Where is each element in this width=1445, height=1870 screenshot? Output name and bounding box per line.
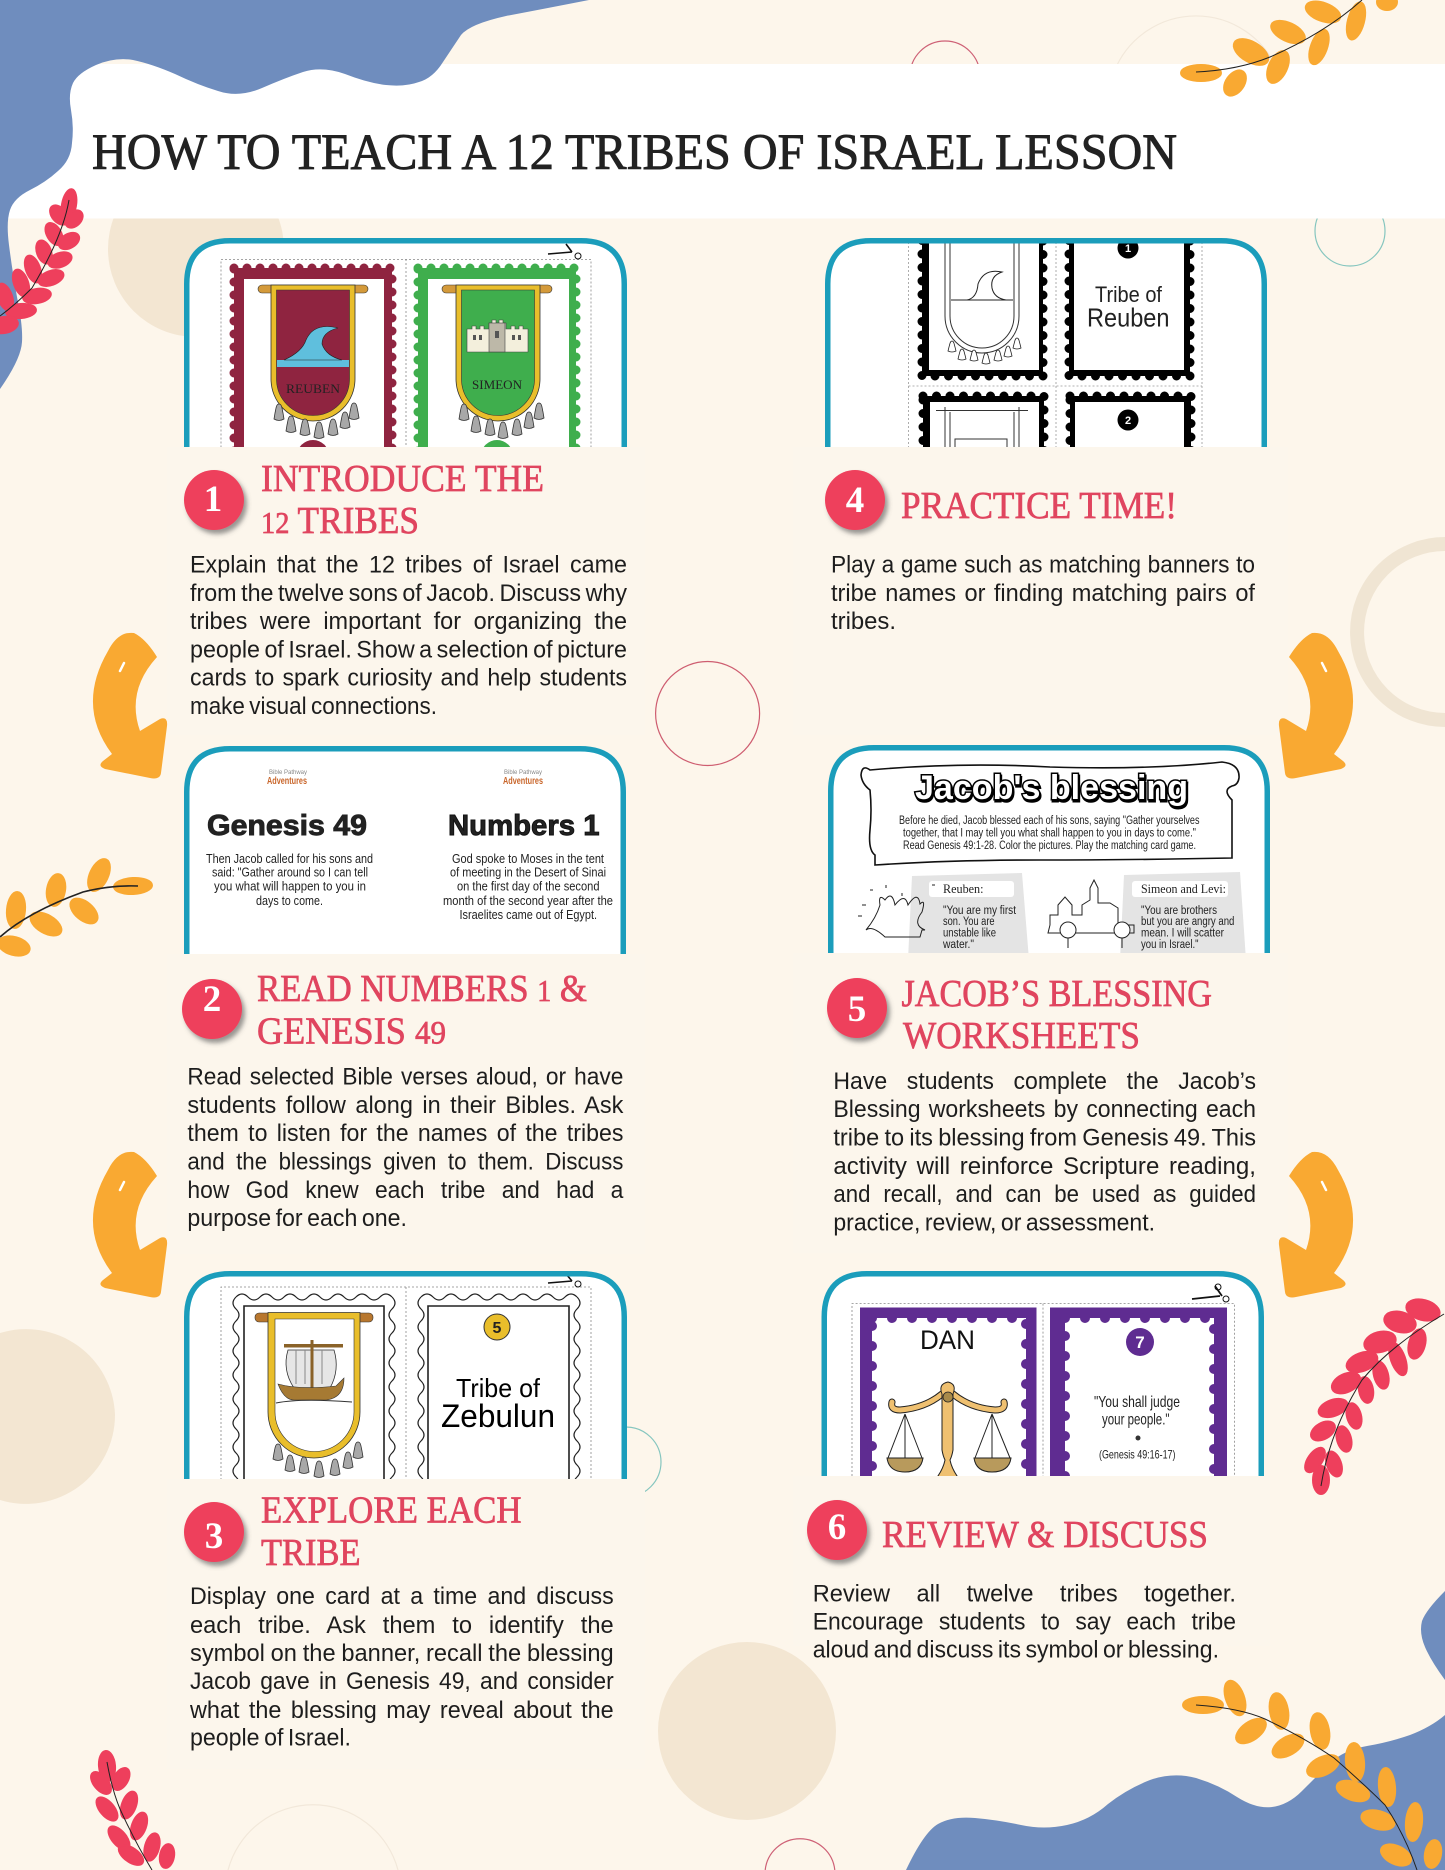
card image: Genesis 49 and Numbers 1: Bible Pathway — [504, 770, 542, 776]
blue blob top left — [0, 0, 589, 389]
card image: Genesis 49 and Numbers 1: Israelites came out of Egypt. — [460, 908, 597, 922]
heading: WORKSHEETS — [903, 1015, 1140, 1057]
blue blob bottom right — [906, 1591, 1445, 1870]
card image: Genesis 49 and Numbers 1: Bible Pathway — [269, 770, 307, 776]
card image: Genesis 49 and Numbers 1: Then Jacob called for his sons and — [206, 852, 373, 866]
card image: Jacob's blessing worksheet — [831, 748, 1267, 960]
heading — [902, 973, 1212, 1057]
card image: Jacob's blessing worksheet: but you are angry and — [1141, 916, 1234, 928]
branch: orange bottom right — [1183, 1678, 1443, 1870]
card image: Genesis 49 and Numbers 1: God spoke to Moses in the tent — [452, 852, 604, 866]
card image: Genesis 49 and Numbers 1: you what will happen to you in — [214, 880, 366, 894]
body text: tribes were important for organizing the — [190, 608, 627, 635]
card image: black and white Reuben cards: 1 — [1125, 243, 1131, 255]
card image: Dan scales and blessing card: (Genesis 49:16-17) — [1099, 1448, 1176, 1462]
body text: symbol on the banner, recall the blessing — [190, 1640, 614, 1667]
body text: Jacob gave in Genesis 49, and consider — [190, 1668, 614, 1695]
card image: Reuben and Simeon banners: REUBEN — [286, 381, 341, 396]
title band — [0, 64, 1445, 218]
arrow: step 4 to step 5 — [1279, 633, 1353, 778]
card image: Genesis 49 and Numbers 1: Adventures — [267, 776, 307, 787]
body text: Review all twelve tribes together. — [813, 1581, 1236, 1608]
heading: TRIBE — [261, 1532, 360, 1574]
card image: Jacob's blessing worksheet: son. You are — [943, 916, 995, 928]
number badge 2: 2 — [203, 979, 221, 1020]
body text: practice, review, or assessment. — [833, 1210, 1155, 1237]
body text: Play a game such as matching banners to — [831, 551, 1255, 578]
card image: Genesis 49 and Numbers 1: Adventures — [503, 776, 543, 787]
card image: Genesis 49 and Numbers 1: of meeting in the Desert of Sinai — [450, 866, 606, 880]
body text: Encourage students to say each tribe — [813, 1609, 1236, 1636]
heading: PRACTICE TIME! — [901, 485, 1177, 527]
card image: Genesis 49 and Numbers 1: Numbers 1 — [448, 810, 600, 842]
card image: Dan scales and blessing card — [824, 1274, 1261, 1500]
number badge 6 — [807, 1500, 867, 1560]
card image: Dan scales and blessing card: 7 — [1135, 1333, 1145, 1352]
card image: Jacob's blessing worksheet: unstable like — [943, 928, 996, 940]
heading — [261, 458, 544, 542]
card image: Genesis 49 and Numbers 1 — [187, 749, 623, 954]
card image: Jacob's blessing worksheet: Jacob's blessing — [915, 769, 1188, 807]
arrow: step 2 to step 3 — [93, 1152, 167, 1297]
number badge 2 — [182, 979, 242, 1039]
card image: black and white Reuben cards: Reuben — [1087, 302, 1170, 332]
body text: tribe names or finding matching pairs of — [831, 580, 1255, 607]
card image: Dan scales and blessing card: DAN — [920, 1325, 975, 1355]
heading — [261, 1490, 522, 1574]
body text: cards to spark curiosity and help students — [190, 665, 627, 692]
body text — [813, 1581, 1236, 1664]
card image: Jacob's blessing worksheet: water." — [942, 939, 974, 951]
number badge 4 — [825, 470, 885, 530]
card image: Reuben and Simeon banners: SIMEON — [472, 377, 523, 392]
body text: each tribe. Ask them to identify the — [190, 1612, 614, 1639]
body text — [831, 551, 1255, 635]
card image: Genesis 49 and Numbers 1: Genesis 49 — [207, 810, 367, 842]
card image: Jacob's blessing worksheet: mean. I will scatter — [1141, 928, 1224, 940]
arrow: step 5 to step 6 — [1279, 1152, 1353, 1297]
body text — [189, 1583, 614, 1752]
step 6 panel — [793, 1274, 1270, 1664]
body text: people of Israel. Show a selection of picture — [190, 636, 627, 663]
card image: Jacob's blessing worksheet: "You are my first — [943, 905, 1017, 917]
body text: them to listen for the names of the tribes — [187, 1120, 623, 1147]
card image: Jacob's blessing worksheet: "You are brothers — [1141, 905, 1217, 917]
body text: Display one card at a time and discuss — [190, 1583, 614, 1610]
card image: Dan scales and blessing card: "You shall judge — [1094, 1394, 1180, 1411]
branch: red bottom left — [87, 1750, 176, 1870]
number badge 6: 6 — [828, 1507, 846, 1548]
title: HOW TO TEACH A 12 TRIBES OF ISRAEL LESSON — [92, 125, 1177, 181]
body text: activity will reinforce Scripture reading, — [833, 1153, 1256, 1180]
card image: Jacob's blessing worksheet: Before he died, Jacob blessed each of his sons, saying "Gather yourselves — [899, 815, 1200, 827]
step 1 panel — [184, 238, 627, 714]
step 5 panel — [827, 745, 1270, 1236]
card image: Jacob's blessing worksheet: Reuben: — [943, 881, 984, 896]
body text — [833, 1068, 1256, 1237]
body text: students follow along in their Bibles. Ask — [187, 1092, 624, 1119]
number badge 1: 1 — [204, 479, 222, 520]
body text: purpose for each one. — [187, 1205, 407, 1232]
card image: Genesis 49 and Numbers 1: said: "Gather around so I can tell — [212, 866, 368, 880]
card image: Zebulun banner and name cards: Zebulun — [441, 1398, 555, 1434]
number badge 4: 4 — [846, 480, 864, 521]
heading: INTRODUCE THE — [261, 458, 544, 500]
body text — [190, 551, 627, 720]
body text: Blessing worksheets by connecting each — [833, 1096, 1256, 1123]
step 2 panel — [182, 746, 626, 1231]
number badge 5 — [827, 978, 887, 1038]
branch: red top left — [0, 188, 86, 335]
number badge 3 — [184, 1502, 244, 1562]
number badge 5: 5 — [848, 989, 866, 1030]
card image: Jacob's blessing worksheet: you in Israel." — [1141, 939, 1198, 951]
card image: black and white Reuben cards: Tribe of — [1095, 282, 1163, 307]
arrow: step 1 to step 2 — [93, 633, 167, 778]
card image: Zebulun banner and name cards — [187, 1274, 624, 1500]
body text — [187, 1064, 624, 1232]
heading: REVIEW & DISCUSS — [882, 1514, 1208, 1556]
body text: and the blessings given to them. Discuss — [187, 1149, 623, 1176]
body text: and recall, and can be used as guided — [833, 1181, 1256, 1208]
card image: black and white Reuben cards: 2 — [1125, 415, 1131, 427]
card image: black and white Reuben cards — [825, 238, 1267, 447]
card image: Genesis 49 and Numbers 1: days to come. — [256, 894, 323, 908]
branch: orange left — [0, 856, 152, 959]
body text: Explain that the 12 tribes of Israel came — [190, 551, 627, 578]
branch: red right — [1301, 1296, 1444, 1494]
card image: Zebulun banner and name cards: 5 — [493, 1320, 502, 1337]
heading: READ NUMBERS 1 & — [257, 968, 587, 1010]
body text: how God knew each tribe and had a — [187, 1177, 624, 1204]
card image: Zebulun banner and name cards: Tribe of — [456, 1373, 541, 1403]
card image: Genesis 49 and Numbers 1: month of the second year after the — [443, 894, 613, 908]
body text: make visual connections. — [190, 693, 437, 720]
card image: Dan scales and blessing card: your people." — [1102, 1412, 1170, 1429]
body text: Have students complete the Jacob’s — [833, 1068, 1256, 1095]
body text: what the blessing may reveal about the — [189, 1697, 614, 1724]
heading: EXPLORE EACH — [261, 1490, 522, 1532]
card image: Jacob's blessing worksheet: together, that I may tell you what shall happen to you in days to come." — [903, 828, 1196, 840]
number badge 3: 3 — [205, 1516, 223, 1557]
heading: GENESIS 49 — [257, 1010, 446, 1052]
body text: people of Israel. — [190, 1725, 351, 1752]
heading: 12 TRIBES — [261, 500, 419, 542]
step 3 panel — [167, 1274, 645, 1769]
step 4 panel — [825, 238, 1267, 629]
heading — [257, 968, 587, 1052]
heading: JACOB’S BLESSING — [902, 973, 1212, 1015]
body text: from the twelve sons of Jacob. Discuss why — [190, 580, 627, 607]
card image: Jacob's blessing worksheet: Read Genesis 49:1-28. Color the pictures. Play the matching card game. — [903, 840, 1196, 852]
body text: tribe to its blessing from Genesis 49. This — [833, 1125, 1256, 1152]
card image: Reuben and Simeon banners — [184, 238, 627, 447]
number badge 1 — [184, 470, 244, 530]
body text: Read selected Bible verses aloud, or have — [187, 1064, 623, 1090]
body text: tribes. — [831, 608, 896, 635]
body text: aloud and discuss its symbol or blessing. — [813, 1637, 1219, 1664]
card image: Jacob's blessing worksheet: Simeon and Levi: — [1141, 881, 1226, 896]
branch: orange top right — [1181, 0, 1397, 100]
card image: Genesis 49 and Numbers 1: on the first day of the second — [457, 880, 600, 894]
